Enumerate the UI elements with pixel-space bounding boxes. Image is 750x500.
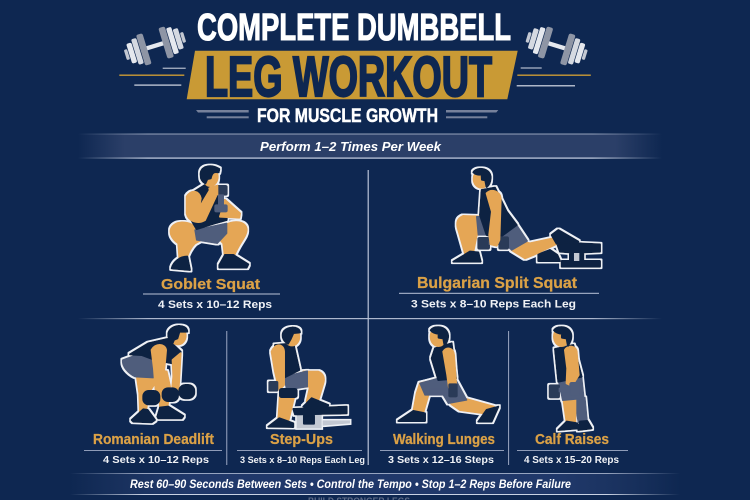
head — [285, 328, 299, 345]
panel: romanian deadlift — [84, 326, 222, 466]
figure: step-ups — [268, 328, 350, 428]
figure: calf raises — [549, 327, 592, 430]
sets: walking lunges: 3 Sets x 12–16 Steps — [388, 454, 494, 466]
sets: calf raises: 4 Sets x 15–20 Reps — [524, 454, 619, 466]
label: walking lunges: Walking Lunges — [393, 432, 495, 448]
frequency banner — [78, 134, 662, 159]
grid dividers — [78, 170, 662, 465]
label: calf raises: Calf Raises — [535, 432, 609, 448]
figure: bulgarian split squat — [453, 169, 600, 267]
panel: goblet squat — [143, 166, 280, 311]
speed lines: right — [517, 68, 591, 86]
figure: romanian deadlift — [123, 326, 194, 422]
footer tips banner: Rest 60–90 Seconds Between Sets • Control the Tempo • Stop 1–2 Reps Before Failure — [130, 477, 571, 491]
title banner: leg workout — [187, 45, 518, 109]
label: bulgarian split squat: Bulgarian Split Squat — [417, 275, 577, 292]
label: romanian deadlift: Romanian Deadlift — [93, 432, 214, 448]
sets: romanian deadlift: 4 Sets x 10–12 Reps — [103, 454, 209, 466]
icon: left dumbbell — [121, 22, 189, 70]
panel: step-ups — [237, 328, 365, 466]
speed lines: left — [119, 68, 186, 86]
figure: goblet squat — [171, 166, 248, 270]
head — [431, 327, 446, 346]
sets: goblet squat: 4 Sets x 10–12 Reps — [158, 299, 272, 311]
sets: step-ups: 3 Sets x 8–10 Reps Each Leg — [240, 455, 365, 466]
head — [203, 167, 218, 186]
subtitle rules — [196, 110, 498, 118]
panel: walking lunges — [380, 327, 504, 466]
title banner: leg workout: LEG WORKOUT — [205, 45, 492, 109]
icon: right dumbbell — [522, 22, 591, 70]
head — [474, 170, 489, 188]
label: step-ups: Step-Ups — [270, 431, 333, 448]
panel: calf raises — [517, 327, 628, 466]
head — [170, 327, 186, 344]
label: goblet squat: Goblet Squat — [161, 276, 260, 293]
subtitle: FOR MUSCLE GROWTH — [257, 106, 438, 127]
footer tips banner — [70, 473, 680, 495]
sets: bulgarian split squat: 3 Sets x 8–10 Reps Each Leg — [411, 298, 576, 310]
figure: walking lunges — [398, 327, 498, 422]
head — [554, 327, 569, 346]
panel: bulgarian split squat — [399, 169, 600, 310]
frequency banner: Perform 1–2 Times Per Week — [260, 139, 442, 154]
title: complete dumbbell: COMPLETE DUMBBELL — [197, 7, 511, 49]
